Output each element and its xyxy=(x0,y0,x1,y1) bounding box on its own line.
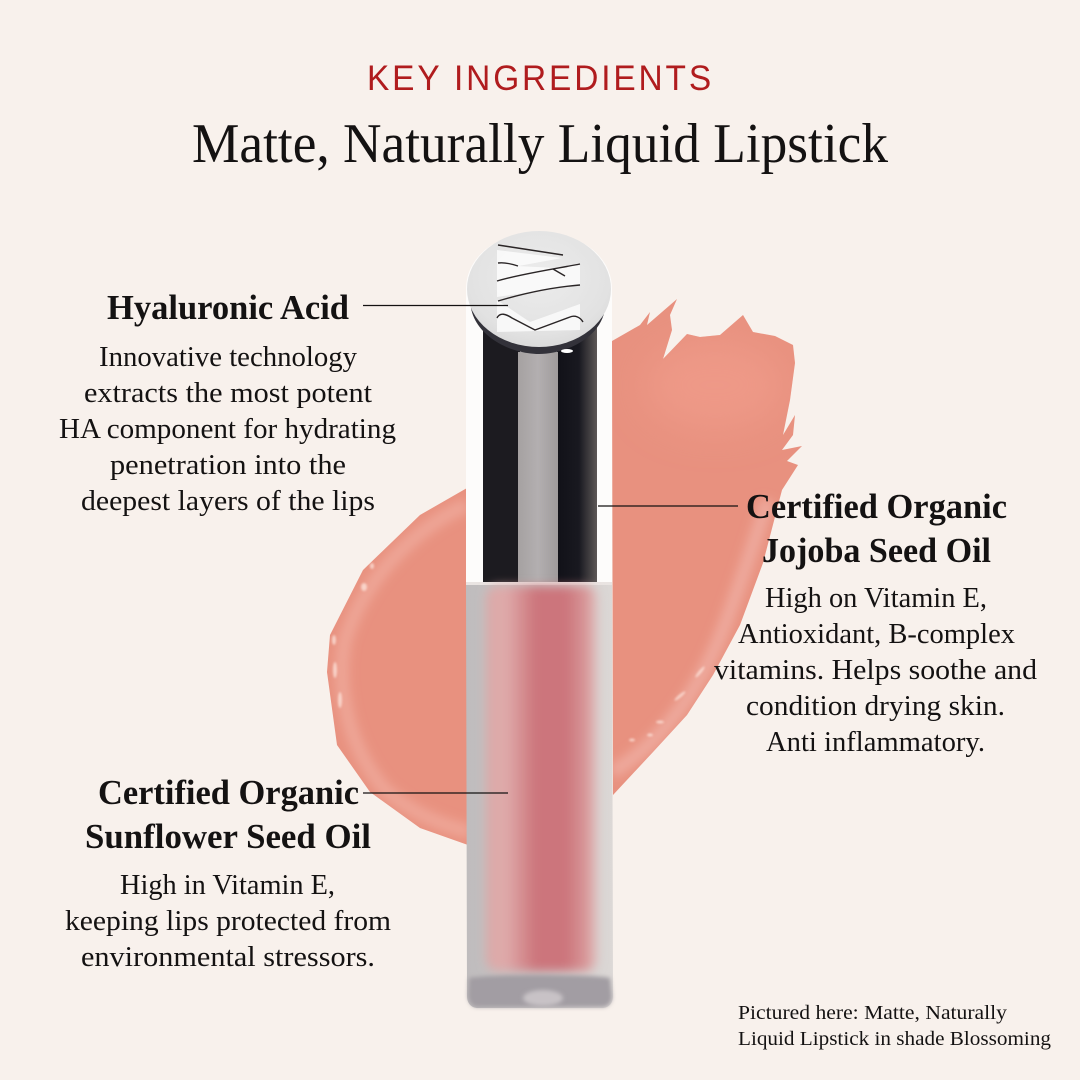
tube cap dark left reflection xyxy=(483,320,520,583)
description: High on Vitamin E, xyxy=(765,583,987,614)
heading: Hyaluronic Acid xyxy=(107,288,350,327)
heading: Sunflower Seed Oil xyxy=(85,817,371,856)
collar line xyxy=(466,582,612,585)
description: deepest layers of the lips xyxy=(81,486,375,517)
cap disc rim xyxy=(471,308,605,354)
title block xyxy=(192,59,888,175)
footnote: pictured shade: Liquid Lipstick in shade Blossoming xyxy=(738,1028,1051,1050)
description: HA component for hydrating xyxy=(59,414,396,445)
swatch glossy specks xyxy=(332,563,706,742)
description xyxy=(65,870,391,973)
eyebrow: key ingredients: KEY INGREDIENTS xyxy=(367,59,714,98)
description: penetration into the xyxy=(110,450,346,481)
frosted tube body xyxy=(466,583,613,1008)
tube base xyxy=(468,975,612,1007)
cap disc with logo xyxy=(467,231,611,347)
leader line: jojoba seed oil xyxy=(598,505,738,507)
description: condition drying skin. xyxy=(746,691,1005,722)
ingredient: sunflower seed oil xyxy=(65,773,391,973)
heading: Certified Organic xyxy=(98,773,359,812)
description: Antioxidant, B-complex xyxy=(738,619,1015,650)
description: keeping lips protected from xyxy=(65,906,391,937)
swatch edge highlight xyxy=(342,505,470,832)
footnote: pictured shade: Pictured here: Matte, Naturally xyxy=(738,1002,1007,1024)
description: extracts the most potent xyxy=(84,378,372,409)
heading: Certified Organic xyxy=(746,487,1007,526)
heading: Jojoba Seed Oil xyxy=(762,531,991,570)
lipstick swatch xyxy=(327,299,802,845)
tube cap centre reflection xyxy=(518,352,558,583)
ingredient: jojoba seed oil xyxy=(714,487,1037,758)
footnote: pictured shade xyxy=(738,1002,1051,1050)
description xyxy=(59,342,396,517)
heading xyxy=(85,773,371,856)
tube cap white body xyxy=(466,232,612,583)
lipstick colour inside tube xyxy=(486,586,597,971)
cap highlight xyxy=(561,349,573,353)
main title: Matte, Naturally Liquid Lipstick xyxy=(192,113,888,175)
description xyxy=(714,583,1037,758)
leader line: hyaluronic acid xyxy=(363,304,508,306)
description: Innovative technology xyxy=(99,342,357,373)
leader line: sunflower seed oil xyxy=(363,792,508,794)
lipstick tube xyxy=(466,231,613,1008)
description: Anti inflammatory. xyxy=(766,727,985,758)
heading xyxy=(746,487,1007,570)
description: High in Vitamin E, xyxy=(120,870,335,901)
description: vitamins. Helps soothe and xyxy=(714,655,1037,686)
ingredient: hyaluronic acid xyxy=(59,288,396,517)
tube cap dark right reflection xyxy=(557,320,597,583)
description: environmental stressors. xyxy=(81,942,375,973)
